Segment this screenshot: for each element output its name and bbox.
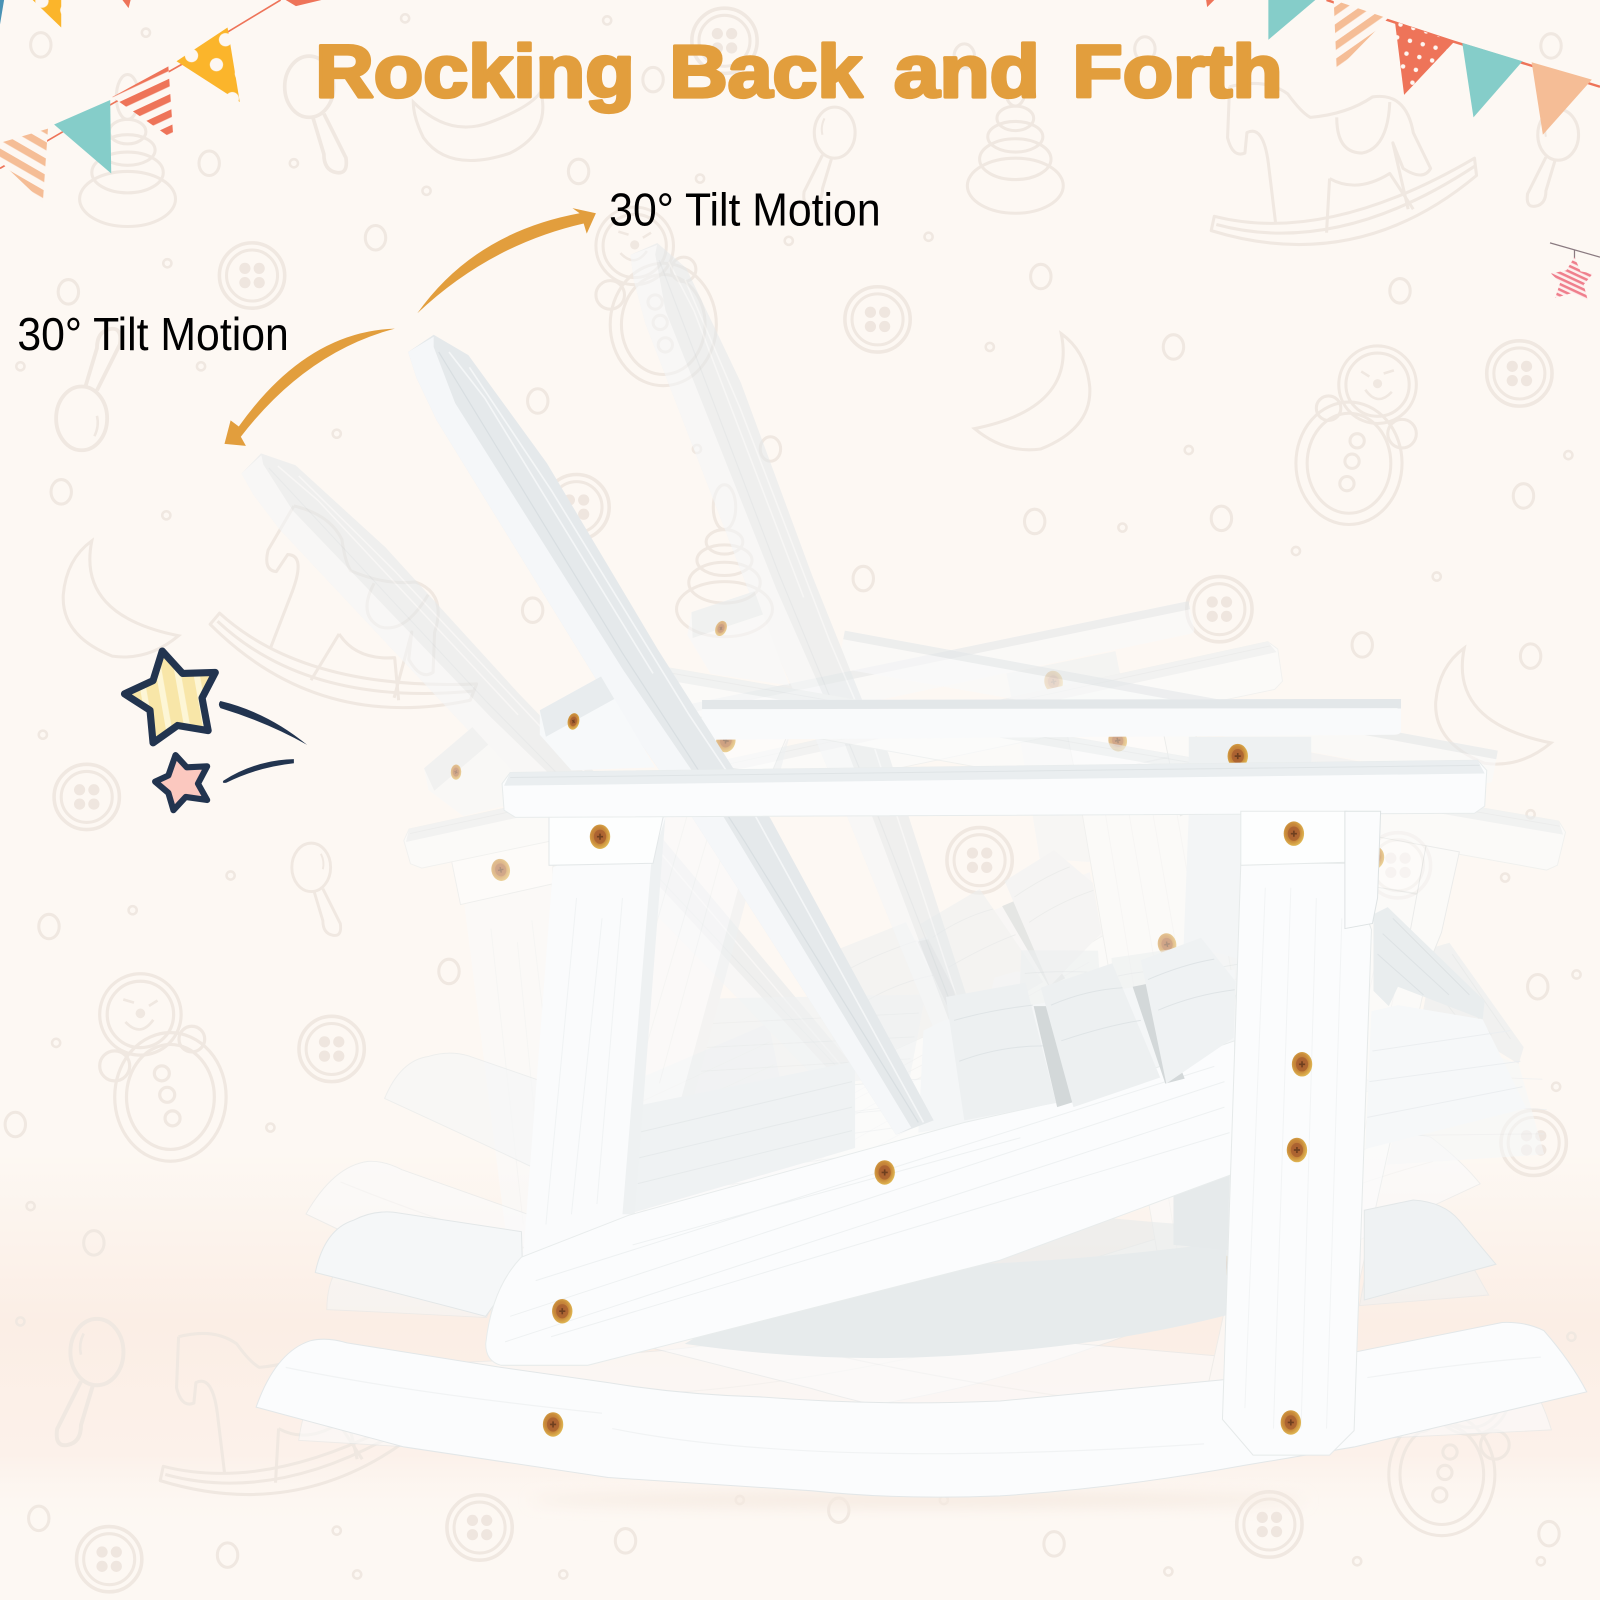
hanging pink star (1550, 243, 1600, 300)
label: left tilt: 30° Tilt Motion (17, 308, 289, 360)
ghost chair: tilted backward (103, 243, 1499, 1520)
far arm (702, 699, 1401, 740)
front rocker (256, 1322, 1587, 1497)
flag: red stripes (112, 66, 173, 140)
soft shadow under chair (531, 1493, 1306, 1507)
far rocker: middle (685, 1242, 1227, 1358)
gap 1 (1034, 1006, 1073, 1107)
front leg (522, 816, 665, 1265)
star: small pink (155, 755, 207, 810)
flag: red sliver (122, 0, 131, 8)
floor shading (0, 1153, 1600, 1531)
decorative shooting stars (124, 651, 307, 810)
flag: yellow sliver (33, 0, 61, 28)
flag: blue sliver (0, 0, 4, 24)
far seat support (918, 969, 1235, 1133)
swoosh: upper (219, 701, 307, 745)
flag: peach (1532, 62, 1592, 135)
screw: front rocker (543, 1412, 563, 1437)
screw: seat rail mid (874, 1160, 895, 1185)
seat slats (946, 938, 1236, 1120)
flag: red sliver top (286, 0, 321, 6)
slat 3 (1141, 938, 1236, 1084)
screw: rear post bottom (1281, 1410, 1301, 1435)
screw: rear post cap (1284, 821, 1304, 846)
front arm (502, 760, 1487, 817)
far under-seat rail (628, 1061, 855, 1214)
main white rocking chair (256, 335, 1587, 1497)
far arm post (1184, 813, 1242, 959)
screw: rear post mid (1287, 1138, 1307, 1162)
far leg lower (1173, 1173, 1230, 1250)
far arm cap (1189, 737, 1311, 765)
back block (540, 677, 655, 770)
backrest (408, 335, 934, 1135)
slat 2 (1041, 963, 1160, 1107)
slat 1 (946, 983, 1056, 1120)
gap 2 (1133, 984, 1185, 1084)
seat rail (486, 1041, 1235, 1365)
bunting: top right (1206, 0, 1600, 135)
screw: back block (565, 710, 582, 732)
bunting: top left (0, 0, 321, 202)
flag: peach stripes (0, 129, 48, 202)
back block shadow side (540, 677, 614, 737)
screw: rear post upper (1292, 1052, 1312, 1077)
flag: teal cut (1268, 0, 1315, 40)
flag: teal (1462, 43, 1522, 117)
flag: yellow dots (177, 28, 240, 102)
seat slat far right (1373, 907, 1485, 1019)
rear small block (1345, 811, 1381, 929)
screw: front leg cap (590, 824, 610, 849)
rear post (1222, 811, 1371, 1455)
swoosh: lower (223, 759, 294, 783)
screw: far post (1228, 744, 1248, 768)
screw: seat rail end (552, 1299, 572, 1323)
star: big yellow (124, 651, 215, 743)
flag: peach stripes (1334, 0, 1388, 70)
flag: teal (54, 100, 111, 173)
front leg cap (549, 816, 663, 865)
title: Back (669, 30, 863, 113)
far rocker: right end (1364, 1200, 1496, 1300)
ghost chair: tilted forward (290, 212, 1600, 1528)
title: Forth (1072, 30, 1283, 113)
far rocker: left end (315, 1212, 522, 1316)
flag: red dots (1395, 21, 1454, 95)
title: Rocking (315, 30, 635, 113)
label: right tilt: 30° Tilt Motion (609, 184, 881, 236)
title: and (894, 30, 1040, 113)
arrow: tilt left (224, 329, 395, 446)
seat rail: right extension (1365, 1005, 1527, 1149)
flag: red sliver (1206, 0, 1214, 7)
arrow: tilt right (417, 208, 596, 313)
